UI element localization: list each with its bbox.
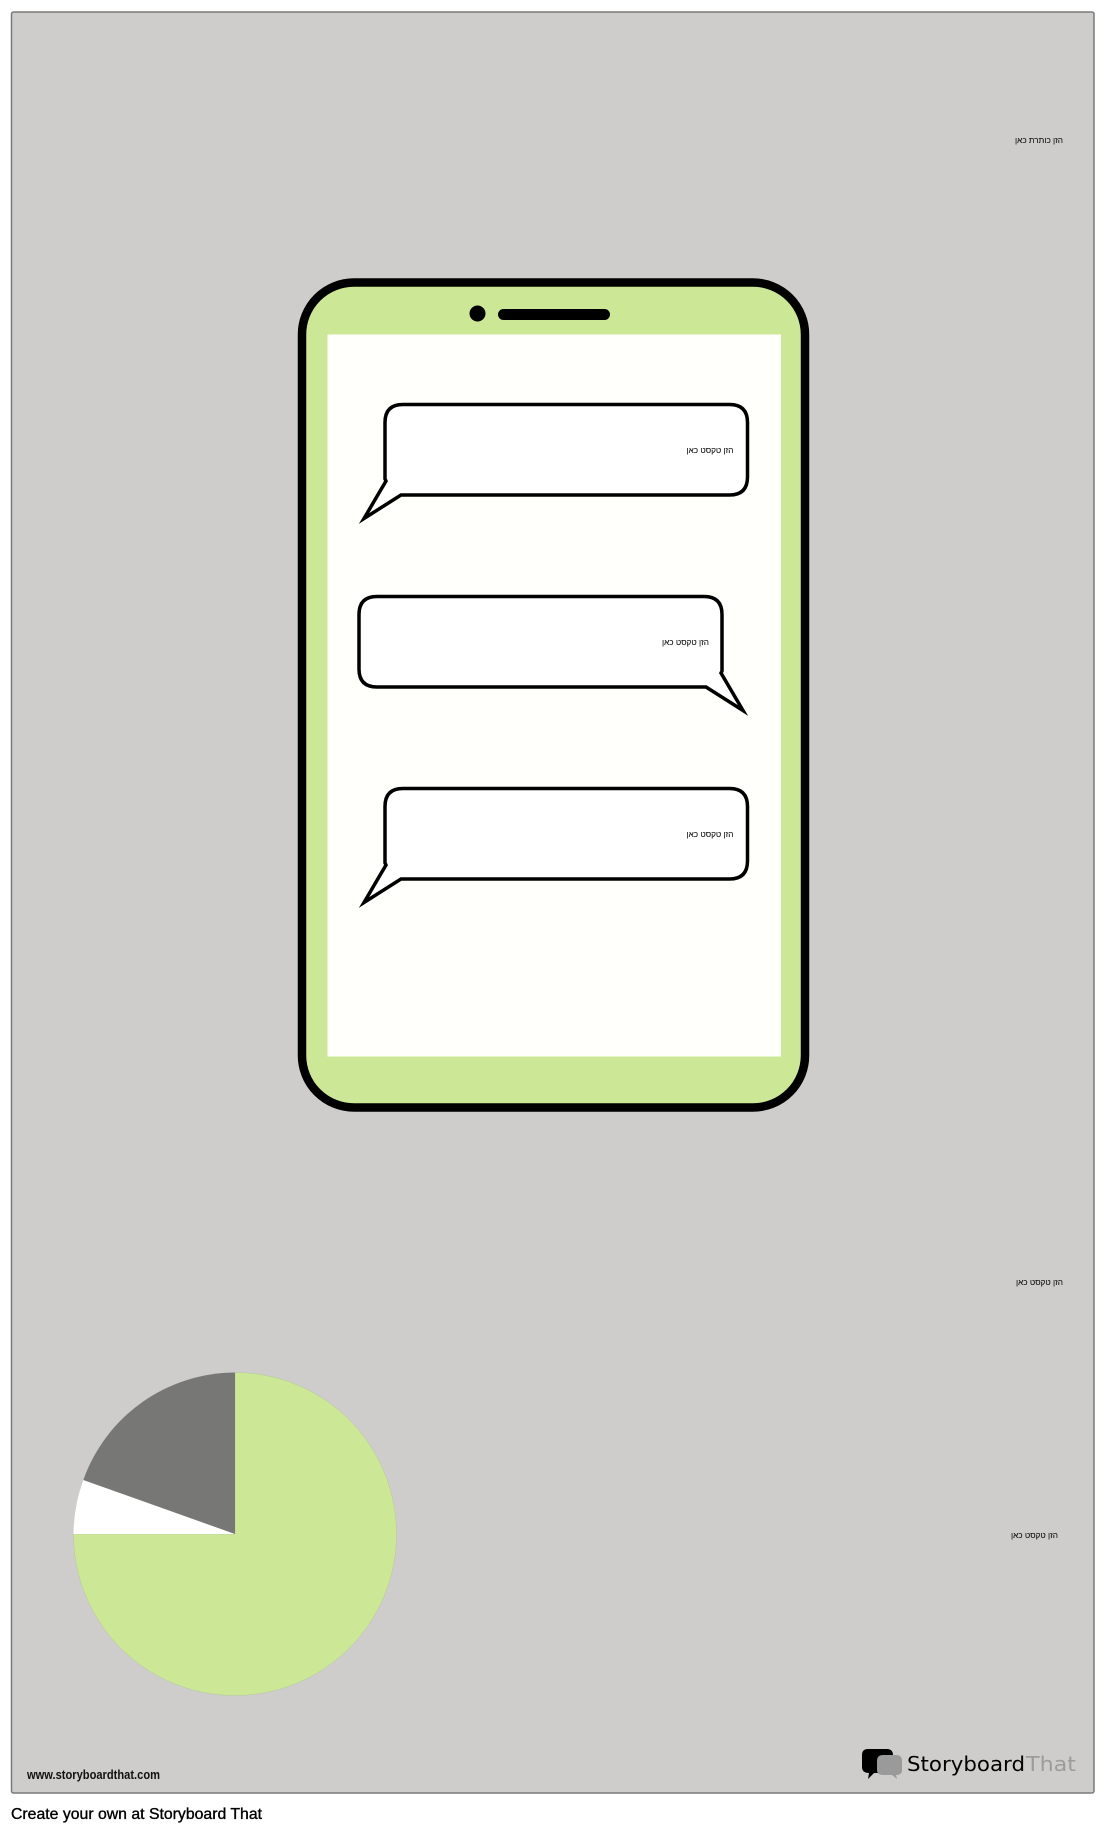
logo wordmark: Storyboard [907,1752,1025,1776]
logo icon: black speech bubble [862,1749,893,1779]
phone speaker [498,309,610,320]
speech bubble 1 [364,404,748,518]
pie slice: grey [83,1372,235,1534]
phone body [302,282,805,1108]
speech bubble 1: הזן טקסט כאן [687,446,734,455]
speech bubble 3: הזן טקסט כאן [687,830,734,839]
footer caption: Create your own at Storyboard That [11,1806,263,1823]
website url: www.storyboardthat.com [26,1767,160,1782]
pie slice: white [74,1480,235,1534]
pie chart [74,1372,396,1696]
text block beside pie chart: הזן טקסט כאן [1011,1531,1058,1540]
pie slice: green [74,1372,396,1696]
speech bubble 2 [359,596,743,710]
logo [862,1749,1076,1779]
speech bubble 2: הזן טקסט כאן [662,638,709,647]
phone screen [328,334,781,1056]
phone illustration [302,282,805,1108]
title text: הזן כותרת כאן [1015,136,1063,145]
text block right middle: הזן טקסט כאן [1016,1278,1063,1287]
logo: That [1025,1752,1076,1776]
phone camera [470,306,486,322]
logo icon: grey speech bubble [877,1755,902,1779]
speech bubble 3 [364,788,748,902]
